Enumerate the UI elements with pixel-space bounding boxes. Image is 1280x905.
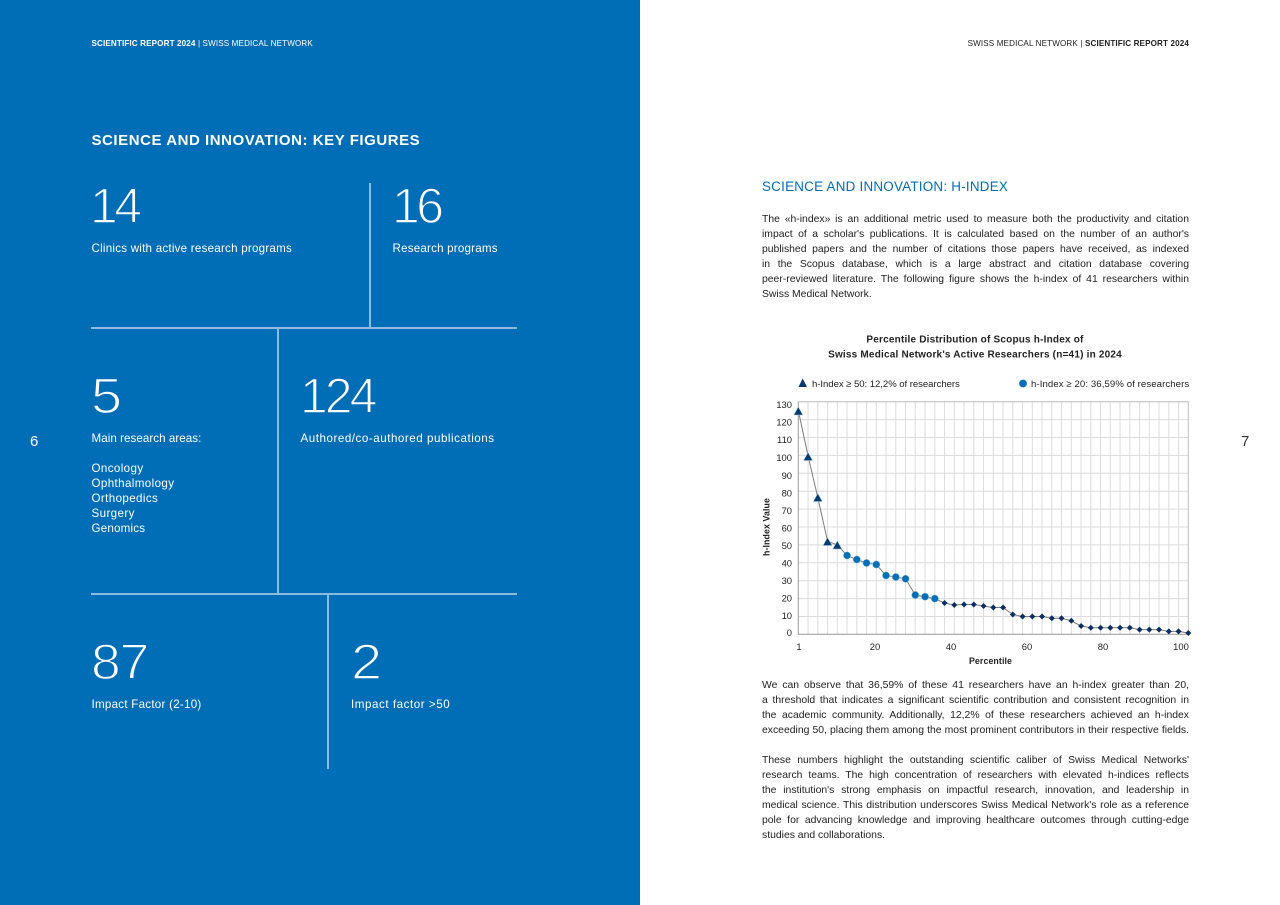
y axis labels: 100 bbox=[776, 452, 792, 463]
chart title bbox=[828, 334, 1122, 360]
y axis labels: 120 bbox=[776, 416, 792, 428]
legend: h-Index ≥ 50: 12,2% of researchers bbox=[812, 379, 960, 390]
page number 7: 7 bbox=[1241, 433, 1249, 450]
chart title: Swiss Medical Network's Active Researchers (n=41) in 2024 bbox=[828, 350, 1122, 360]
y axis labels: 130 bbox=[776, 399, 792, 410]
figure: 5 main research areas: Orthopedics bbox=[92, 492, 158, 505]
data line bbox=[798, 410, 1188, 633]
figure: 5 main research areas: Oncology bbox=[92, 462, 144, 475]
y axis title: h-Index Value bbox=[762, 498, 772, 556]
figure: 5 main research areas: 5 bbox=[91, 368, 121, 424]
x axis labels: 20 bbox=[870, 641, 880, 652]
markers: h-index above 20 bbox=[843, 552, 938, 602]
figure: 124 publications: Authored/co-authored publications bbox=[300, 432, 495, 445]
legend: h-Index ≥ 20: 36,59% of researchers bbox=[1031, 379, 1189, 390]
running header left: SCIENTIFIC REPORT 2024 | SWISS MEDICAL NETWORK bbox=[92, 39, 313, 48]
figure: 14 clinics: 14 bbox=[90, 178, 139, 234]
text block: findings: the academic community. Additionally, 12,2% of these researchers achieved an h-index bbox=[762, 710, 1189, 721]
y axis labels: 80 bbox=[782, 488, 792, 498]
y axis labels bbox=[776, 399, 792, 638]
figure: 14 clinics: Clinics with active research programs bbox=[92, 242, 292, 255]
x axis labels: 60 bbox=[1022, 641, 1032, 652]
panel: key figures page bbox=[0, 0, 640, 905]
figure: 87 impact factor: 87 bbox=[91, 634, 148, 690]
x axis labels bbox=[796, 641, 1189, 652]
text block: h-index intro: published papers and the number of citations those papers have received, as indexed bbox=[762, 244, 1189, 255]
figure: 124 publications: 124 bbox=[300, 368, 374, 424]
figure: 124 publications bbox=[300, 368, 495, 445]
text block: h-index intro: in the Scopus database, which is a large abstract and citation database covering bbox=[762, 259, 1189, 270]
running header right: SWISS MEDICAL NETWORK | SCIENTIFIC REPORT 2024 bbox=[968, 39, 1189, 48]
text block: conclusions: pole for advancing knowledge and improving healthcare outcomes through cutting-edge bbox=[762, 815, 1189, 826]
figure: 14 clinics bbox=[90, 178, 292, 255]
y axis labels: 60 bbox=[782, 522, 792, 534]
y axis labels: 30 bbox=[782, 575, 792, 586]
figure: 16 research programs: Research programs bbox=[392, 242, 498, 255]
text block: conclusions: studies and collaborations. bbox=[762, 830, 885, 841]
text block: h-index intro: The «h-index» is an additional metric used to measure both the productivity and citation bbox=[762, 214, 1189, 225]
text block: findings bbox=[762, 680, 1189, 736]
text block: findings: We can observe that 36,59% of these 41 researchers have an h-index greater than 20, bbox=[762, 680, 1189, 691]
x axis labels: 80 bbox=[1098, 641, 1108, 652]
x axis labels: 100 bbox=[1173, 641, 1189, 652]
x axis labels: 40 bbox=[946, 641, 956, 652]
figure: 2 impact factor over 50: Impact factor >50 bbox=[351, 698, 450, 711]
y axis labels: 90 bbox=[782, 470, 792, 481]
figure: 5 main research areas: Ophthalmology bbox=[92, 477, 174, 490]
text block: conclusions: research teams. The high concentration of researchers with elevated h-indices reflects bbox=[762, 770, 1189, 781]
text block: h-index intro: peer-reviewed literature. The following figure shows the h-index of 41 researchers within bbox=[762, 274, 1189, 285]
y axis labels: 10 bbox=[782, 610, 792, 621]
figure: 5 main research areas: Main research areas: bbox=[92, 432, 201, 445]
legend bbox=[798, 378, 1189, 390]
figure: 2 impact factor over 50 bbox=[351, 634, 450, 711]
y axis labels: 20 bbox=[782, 592, 792, 604]
chart title: Percentile Distribution of Scopus h-Index of bbox=[866, 334, 1084, 346]
y axis labels: 40 bbox=[782, 558, 792, 568]
heading: key figures: SCIENCE AND INNOVATION: KEY FIGURES bbox=[92, 132, 420, 149]
text block: h-index intro: impact of a scholar's publications. It is calculated based on the number of an author's bbox=[762, 229, 1189, 240]
chart: h-index percentile distribution bbox=[762, 334, 1192, 666]
text block: h-index intro bbox=[762, 214, 1189, 300]
text block: conclusions: medical science. This distribution underscores Swiss Medical Network's role as a reference bbox=[762, 800, 1189, 811]
figure: 5 main research areas: Surgery bbox=[92, 507, 135, 520]
x axis labels: 1 bbox=[796, 641, 802, 652]
text block: conclusions: These numbers highlight the outstanding scientific caliber of Swiss Medical Networks' bbox=[762, 755, 1189, 766]
y axis labels: 70 bbox=[782, 505, 792, 516]
figure: 87 impact factor bbox=[91, 634, 202, 711]
figure: 87 impact factor: Impact Factor (2-10) bbox=[92, 698, 202, 711]
y axis labels: 50 bbox=[782, 540, 792, 551]
heading: h-index: SCIENCE AND INNOVATION: H-INDEX bbox=[762, 179, 1008, 194]
figure: 16 research programs bbox=[392, 178, 498, 255]
text block: conclusions: the institution's strong emphasis on impactful research, innovation, and leadership in bbox=[762, 785, 1189, 796]
figure: 5 main research areas bbox=[91, 368, 201, 535]
text block: findings: a threshold that indicates a significant scientific contribution and consistent recognition in bbox=[762, 695, 1189, 706]
markers: h-index above 50 bbox=[794, 407, 842, 549]
figure: 16 research programs: 16 bbox=[392, 178, 441, 234]
figure: 5 main research areas: Genomics bbox=[92, 522, 145, 535]
y axis labels: 110 bbox=[777, 434, 792, 445]
page number 6: 6 bbox=[30, 433, 38, 450]
text block: h-index intro: Swiss Medical Network. bbox=[762, 289, 872, 300]
text block: conclusions bbox=[762, 755, 1189, 841]
markers: remaining researchers bbox=[942, 600, 1191, 636]
y axis labels: 0 bbox=[787, 627, 792, 638]
text block: findings: exceeding 50, placing them among the most prominent contributors in their respective fields. bbox=[762, 725, 1189, 736]
x axis title: Percentile bbox=[969, 656, 1012, 666]
figure: 2 impact factor over 50: 2 bbox=[351, 634, 381, 690]
